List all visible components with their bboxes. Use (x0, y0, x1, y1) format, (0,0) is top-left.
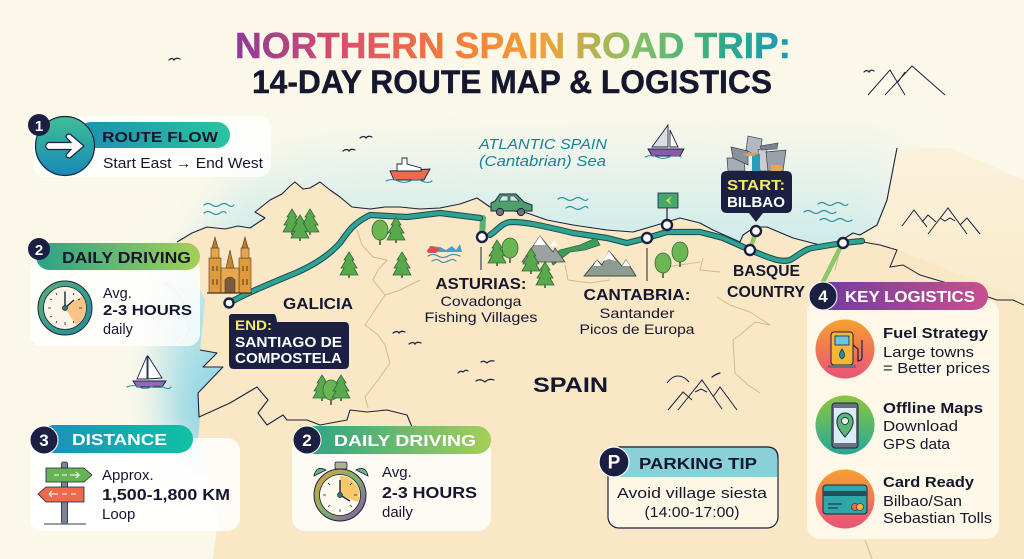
region label: Cantabria: CANTABRIA: (584, 287, 690, 304)
start tag: Bilbao (721, 171, 792, 222)
region label: Basque Country: BASQUE (733, 263, 800, 280)
region label: Galicia: GALICIA (283, 296, 353, 313)
region label: Spain: SPAIN (533, 374, 608, 397)
panel: daily driving bottom: daily (382, 504, 413, 521)
icon: ship (386, 158, 432, 182)
panel: daily driving left: 2-3 HOURS (103, 302, 192, 319)
mountains: top right outline (868, 66, 945, 95)
panel: route flow: ROUTE FLOW (102, 129, 219, 146)
panel: daily driving left (28, 238, 200, 346)
badge 2 (293, 426, 321, 454)
region label: Asturias: ASTURIAS: (436, 276, 526, 293)
icon: sailboat north (645, 125, 684, 158)
panel: daily driving left: Avg. (103, 286, 132, 302)
badge 4: 4 (818, 287, 828, 306)
badge 1 (28, 114, 50, 136)
badge 2: 2 (302, 431, 312, 450)
region label: Asturias: Fishing Villages (424, 309, 538, 325)
sea: Cantabrian Sea (168, 115, 905, 470)
panel: key logistics: KEY LOGISTICS (845, 289, 975, 306)
panel: distance: Approx. (102, 467, 154, 484)
land: France (860, 148, 1024, 559)
badge 3 (30, 426, 58, 454)
region label: Cantabria: Picos de Europa (580, 321, 695, 337)
icon: car (491, 194, 532, 216)
end tag: Santiago: END: (235, 317, 272, 333)
region label: Basque Country: COUNTRY (727, 284, 806, 301)
logistics text: fuel strategy: Fuel Strategy (883, 325, 989, 342)
logistics text: fuel strategy: Large towns (883, 345, 974, 361)
panel: parking tip: PARKING TIP (639, 456, 757, 473)
land: Northern Spain (177, 182, 1024, 559)
regional borders (164, 230, 872, 559)
mountains: Picos de Europa west (522, 236, 565, 288)
logistics text: card ready: Bilbao/San (883, 494, 962, 510)
region label: Cantabria (580, 248, 695, 337)
daily driving pill (300, 426, 491, 454)
key logistics pill (815, 282, 988, 310)
mountains: central Spain outline (667, 376, 737, 410)
logistics text: offline maps: Download (883, 419, 958, 435)
icon: fishing village (427, 244, 462, 262)
route line (229, 213, 862, 303)
panel: daily driving bottom: Avg. (382, 464, 412, 481)
panel: daily driving bottom: 2-3 HOURS (382, 485, 477, 502)
icon: Guggenheim Bilbao (727, 136, 786, 171)
start tag: Bilbao: BILBAO (727, 195, 785, 211)
icon: sailboat west (127, 356, 171, 388)
icon: phone map (816, 396, 874, 454)
icon: fuel pump (816, 320, 874, 378)
logistics text: offline maps (883, 400, 983, 453)
sea label: (Cantabrian) Sea (479, 153, 606, 170)
distance pill (40, 425, 193, 453)
logistics text: card ready: Card Ready (883, 474, 975, 491)
green park patch (550, 238, 600, 265)
icon: signpost (38, 462, 92, 524)
badge P (599, 447, 629, 477)
logistics text: fuel strategy (883, 325, 990, 377)
title: NORTHERN SPAIN ROAD TRIP: (235, 25, 791, 66)
panel: daily driving left: DAILY DRIVING (62, 250, 191, 267)
logistics text: card ready: Sebastian Tolls (883, 511, 992, 527)
panel: parking tip: (14:00-17:00) (644, 504, 740, 521)
title: 14-DAY ROUTE MAP & LOGISTICS (252, 64, 772, 100)
coastline (177, 148, 897, 245)
panel: distance: Loop (102, 506, 135, 523)
icon: Santiago cathedral (207, 237, 252, 293)
icon: clock (38, 281, 92, 335)
badge 2 (28, 238, 50, 260)
badge 1: 1 (35, 118, 43, 135)
parking header (609, 448, 777, 477)
panel: route flow: Start East → End West (103, 156, 263, 172)
region label: Basque Country (727, 263, 806, 301)
mountains: Cantabria (584, 251, 636, 276)
logistics text: card ready (883, 474, 992, 527)
daily driving pill (36, 243, 200, 270)
panel: daily driving bottom (292, 426, 491, 531)
icon: route arrow circle (36, 116, 94, 176)
panel: parking tip (599, 447, 778, 528)
logistics text: offline maps: GPS data (883, 437, 951, 453)
Spain-France border (863, 242, 1024, 305)
icon: flag (658, 193, 678, 220)
start tag: Bilbao: START: (727, 177, 785, 194)
panel: distance (30, 425, 240, 531)
end tag: Santiago: COMPOSTELA (235, 351, 343, 367)
icon: credit card (816, 470, 874, 528)
badge 4 (809, 282, 837, 310)
region label: Asturias: Covadonga (440, 293, 522, 309)
end tag: Santiago (229, 314, 349, 369)
panel: parking tip: Avoid village siesta (617, 485, 768, 502)
region label: Asturias (424, 247, 538, 325)
logistics text: offline maps: Offline Maps (883, 400, 983, 417)
badge 2: 2 (35, 242, 43, 259)
waves (204, 198, 852, 222)
panel: route flow (28, 114, 271, 177)
panel: distance: 1,500-1,800 KM (102, 487, 230, 504)
southern shoreline (198, 350, 412, 427)
decorative birds (169, 58, 874, 382)
title (235, 25, 791, 100)
route nodes (224, 220, 848, 308)
sea label (478, 136, 607, 170)
panel: key logistics (807, 282, 999, 539)
panel: daily driving left: daily (103, 322, 134, 338)
logistics text: fuel strategy: = Better prices (883, 361, 990, 377)
end tag: Santiago: SANTIAGO DE (235, 335, 342, 351)
icon: stopwatch (314, 462, 368, 521)
panel: daily driving bottom: DAILY DRIVING (334, 433, 476, 450)
trees (283, 209, 688, 405)
mountains: France outline (902, 208, 980, 234)
region label: Cantabria: Santander (600, 305, 675, 321)
sea label: ATLANTIC SPAIN (478, 136, 607, 153)
badge P: P (608, 452, 621, 474)
panel: distance: DISTANCE (72, 432, 167, 449)
badge 3: 3 (39, 431, 49, 450)
route flow pill (78, 122, 230, 148)
